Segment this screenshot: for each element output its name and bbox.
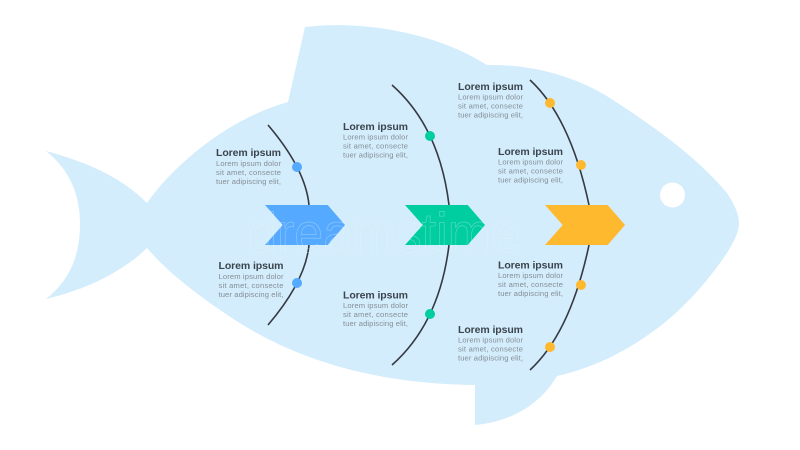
text block: yellow 2: tuer adipiscing elit, bbox=[498, 176, 563, 184]
text block: blue lower bbox=[218, 260, 284, 299]
text block: yellow 2: sit amet, consecte bbox=[498, 166, 563, 176]
blue chevron arrow bbox=[265, 205, 345, 245]
text block: green lower bbox=[343, 290, 408, 328]
text block: yellow 2: Lorem ipsum bbox=[498, 146, 563, 158]
text block: yellow 3: tuer adipiscing elit, bbox=[498, 289, 563, 298]
yellow dot 4 bbox=[545, 342, 555, 352]
text block: yellow 4: sit amet, consecte bbox=[458, 344, 523, 354]
watermark: dreamstime bbox=[248, 201, 520, 264]
text block: yellow 1: sit amet, consecte bbox=[458, 102, 523, 110]
yellow dot 1 bbox=[545, 98, 555, 108]
text block: yellow 1: tuer adipiscing elit, bbox=[458, 110, 523, 120]
green dot lower bbox=[425, 309, 435, 319]
text block: yellow 4: tuer adipiscing elit, bbox=[458, 354, 523, 362]
text block: yellow 1: Lorem ipsum bbox=[458, 81, 523, 93]
text block: yellow 2: Lorem ipsum dolor bbox=[498, 158, 563, 166]
yellow dot 2 bbox=[576, 160, 586, 170]
text block: green upper: Lorem ipsum bbox=[343, 121, 408, 133]
text block: green lower: Lorem ipsum bbox=[343, 290, 408, 302]
text block: green lower: tuer adipiscing elit, bbox=[343, 319, 408, 328]
text block: blue upper: Lorem ipsum dolor bbox=[216, 159, 281, 168]
text block: blue upper: sit amet, consecte bbox=[216, 168, 281, 177]
text block: green lower: Lorem ipsum dolor bbox=[343, 301, 408, 310]
yellow chevron arrow bbox=[545, 205, 625, 245]
green ribs bbox=[392, 85, 449, 365]
blue dot lower bbox=[292, 278, 302, 288]
text block: yellow 4 bbox=[458, 324, 523, 362]
text block: blue upper: Lorem ipsum bbox=[216, 147, 281, 159]
text block: yellow 4: Lorem ipsum bbox=[458, 324, 523, 336]
fish eye bbox=[660, 182, 685, 208]
text block: yellow 3: Lorem ipsum bbox=[498, 260, 563, 272]
text block: blue lower: tuer adipiscing elit, bbox=[218, 290, 284, 299]
text block: green lower: sit amet, consecte bbox=[343, 310, 408, 319]
fish body silhouette bbox=[46, 25, 739, 425]
text block: green upper: Lorem ipsum dolor bbox=[343, 132, 408, 142]
text block: yellow 1 bbox=[458, 81, 523, 120]
text block: blue lower: Lorem ipsum dolor bbox=[218, 272, 284, 281]
text block: yellow 3 bbox=[498, 260, 563, 298]
text block: green upper: sit amet, consecte bbox=[343, 142, 408, 150]
yellow ribs bbox=[530, 80, 589, 370]
blue dot upper bbox=[292, 162, 302, 172]
text block: yellow 1: Lorem ipsum dolor bbox=[458, 92, 523, 102]
yellow dot 3 bbox=[576, 280, 586, 290]
text block: green upper: tuer adipiscing elit, bbox=[343, 150, 408, 160]
green chevron arrow bbox=[405, 205, 485, 245]
text block: yellow 3: Lorem ipsum dolor bbox=[498, 271, 563, 280]
text block: blue upper: tuer adipiscing elit, bbox=[216, 177, 281, 186]
text block: green upper bbox=[343, 121, 408, 160]
blue ribs bbox=[268, 125, 309, 325]
text block: blue lower: sit amet, consecte bbox=[218, 281, 284, 290]
text block: yellow 3: sit amet, consecte bbox=[498, 280, 563, 289]
text block: blue upper bbox=[216, 147, 281, 186]
text block: yellow 4: Lorem ipsum dolor bbox=[458, 336, 523, 344]
text block: yellow 2 bbox=[498, 146, 563, 184]
green dot upper bbox=[425, 131, 435, 141]
text block: blue lower: Lorem ipsum bbox=[218, 260, 284, 272]
